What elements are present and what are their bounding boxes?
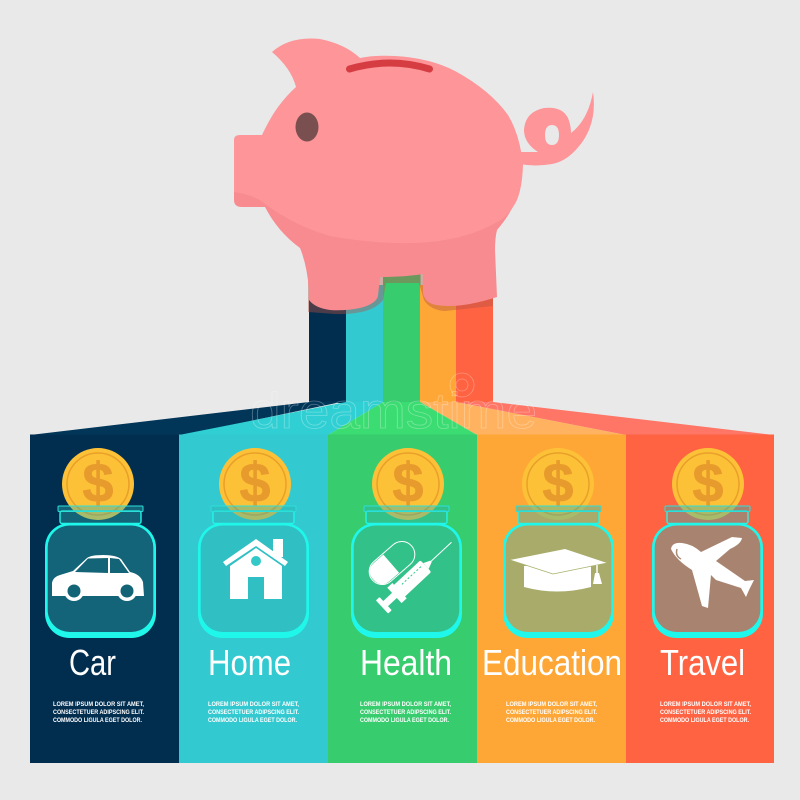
coin: travel: $ <box>692 451 724 514</box>
coin: car <box>62 448 134 520</box>
text block: health: CONSECTETUER ADIPSCING ELIT. <box>360 709 451 716</box>
text block: health <box>360 701 451 724</box>
panel: health background <box>328 434 477 763</box>
panel: home background <box>179 434 328 763</box>
text block: home: COMMODO LIGULA EGET DOLOR. <box>208 717 297 724</box>
coin: health: $ <box>392 451 424 514</box>
text block: education: LOREM IPSUM DOLOR SIT AMET, <box>506 701 597 708</box>
text block: car <box>53 701 144 724</box>
text block: travel <box>660 701 751 724</box>
coin: car: $ <box>82 451 114 514</box>
icon: graduation cap <box>510 549 607 592</box>
pig coin slot <box>350 63 430 69</box>
jar: health <box>351 506 462 638</box>
text block: education: CONSECTETUER ADIPSCING ELIT. <box>506 709 597 716</box>
text block: home: CONSECTETUER ADIPSCING ELIT. <box>208 709 299 716</box>
text block: travel: CONSECTETUER ADIPSCING ELIT. <box>660 709 751 716</box>
heading: Travel: Travel <box>660 642 745 683</box>
heading: Car: Car <box>69 642 116 683</box>
text block: health: COMMODO LIGULA EGET DOLOR. <box>360 717 449 724</box>
text block: education <box>506 701 597 724</box>
coin: travel <box>672 448 744 520</box>
panel: education background <box>477 434 626 763</box>
icon: car <box>52 555 144 601</box>
heading: Education: Education <box>482 642 622 683</box>
heading: Health: Health <box>360 642 452 683</box>
panel: travel background <box>626 434 774 763</box>
pig eye <box>296 112 318 142</box>
text block: car: CONSECTETUER ADIPSCING ELIT. <box>53 709 144 716</box>
shadow of pig legs on streams <box>308 270 493 314</box>
coin: education: $ <box>542 451 574 514</box>
text block: home <box>208 701 299 724</box>
pig tail <box>520 92 594 166</box>
coin: home <box>219 448 291 520</box>
vertical rainbow streams <box>309 272 493 403</box>
text block: travel: COMMODO LIGULA EGET DOLOR. <box>660 717 749 724</box>
text block: home: LOREM IPSUM DOLOR SIT AMET, <box>208 701 299 708</box>
coin: home: $ <box>239 451 271 514</box>
icon: house <box>223 539 288 599</box>
watermark: dreamstime <box>250 383 537 439</box>
sloped connectors from streams to panels <box>30 401 774 436</box>
text block: travel: LOREM IPSUM DOLOR SIT AMET, <box>660 701 751 708</box>
jar: education <box>503 506 614 638</box>
icon: airplane <box>671 537 754 608</box>
heading: Home: Home <box>208 642 291 683</box>
panel: car background <box>30 434 179 763</box>
text block: car: COMMODO LIGULA EGET DOLOR. <box>53 717 142 724</box>
pig upper body <box>234 39 523 243</box>
jar: travel <box>652 506 763 638</box>
jar: home <box>198 506 309 638</box>
coin: education <box>522 448 594 520</box>
pig lower body <box>234 120 516 310</box>
coin: health <box>372 448 444 520</box>
text block: education: COMMODO LIGULA EGET DOLOR. <box>506 717 595 724</box>
text block: health: LOREM IPSUM DOLOR SIT AMET, <box>360 701 451 708</box>
icon: pill and syringe <box>364 535 459 615</box>
piggy bank <box>234 39 594 310</box>
text block: car: LOREM IPSUM DOLOR SIT AMET, <box>53 701 144 708</box>
jar: car <box>45 506 156 638</box>
